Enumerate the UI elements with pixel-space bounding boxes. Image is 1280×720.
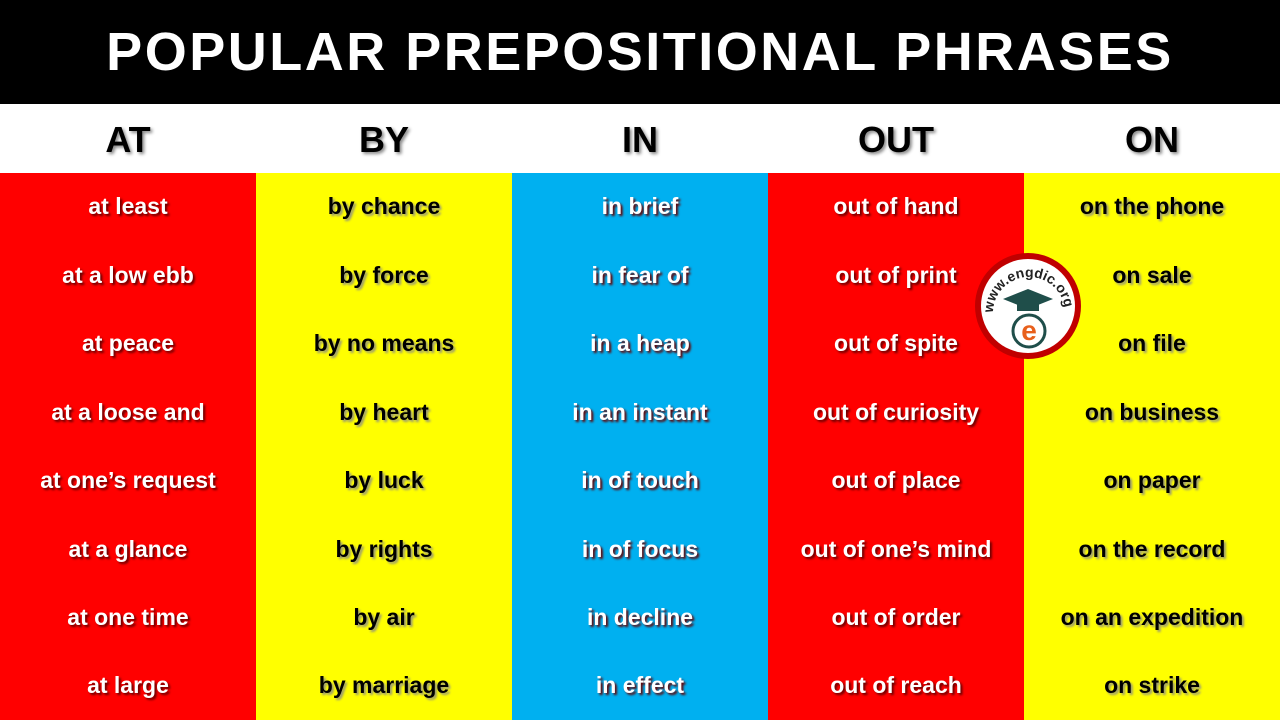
column: AT: at large — [87, 672, 169, 698]
column: IN: in of focus — [582, 536, 698, 562]
column: IN: in decline — [587, 604, 693, 630]
column: ON: on business — [1085, 399, 1219, 425]
logo: engdic.org — [975, 253, 1081, 359]
column: BY: by air — [353, 604, 415, 630]
column: BY: by luck — [344, 467, 424, 493]
column: ON: on the record — [1079, 536, 1225, 562]
column: AT: at peace — [82, 330, 174, 356]
column: IN: in effect — [596, 672, 684, 698]
header: AT: AT — [105, 119, 151, 160]
header: OUT: OUT — [858, 119, 934, 160]
column: BY: by rights — [335, 536, 433, 562]
column: AT: at one’s request — [40, 467, 216, 493]
column: BY: by heart — [339, 399, 429, 425]
column: IN: in of touch — [581, 467, 699, 493]
column: IN — [512, 173, 768, 720]
column: OUT — [768, 173, 1024, 720]
column: ON: on the phone — [1080, 193, 1224, 219]
column: OUT: out of place — [831, 467, 961, 493]
column: OUT: out of curiosity — [813, 399, 979, 425]
column: AT: at one time — [67, 604, 189, 630]
column: AT: at a low ebb — [62, 262, 194, 288]
logo: engdic.org: www.engdic.org — [985, 268, 1072, 312]
column: BY: by marriage — [319, 672, 449, 698]
column: OUT: out of spite — [834, 330, 958, 356]
column: OUT: out of order — [831, 604, 961, 630]
column: AT — [0, 173, 256, 720]
column: BY: by chance — [328, 193, 440, 219]
column: AT: at a glance — [69, 536, 187, 562]
column: IN: in fear of — [591, 262, 689, 288]
column: IN: in an instant — [572, 399, 708, 425]
column: ON: on paper — [1103, 467, 1201, 493]
column: OUT: out of reach — [830, 672, 962, 698]
title — [0, 0, 1280, 104]
header: IN: IN — [622, 119, 658, 160]
column: AT: at least — [88, 193, 168, 219]
column: OUT: out of one’s mind — [801, 536, 991, 562]
column: ON: on sale — [1112, 262, 1192, 288]
column: BY — [256, 173, 512, 720]
column: ON — [1024, 173, 1280, 720]
column: OUT: out of hand — [833, 193, 959, 219]
column: OUT: out of print — [835, 262, 957, 288]
column: BY: by no means — [314, 330, 454, 356]
column: IN: in a heap — [590, 330, 690, 356]
logo: engdic.org: e — [1021, 315, 1037, 346]
header: BY: BY — [359, 119, 409, 160]
column: IN: in brief — [602, 193, 678, 219]
title: POPULAR PREPOSITIONAL PHRASES — [106, 22, 1174, 82]
header: ON: ON — [1125, 119, 1179, 160]
column: BY: by force — [339, 262, 429, 288]
column: ON: on strike — [1104, 672, 1200, 698]
column: AT: at a loose and — [51, 399, 205, 425]
column: ON: on an expedition — [1061, 604, 1243, 630]
column: ON: on file — [1118, 330, 1186, 356]
